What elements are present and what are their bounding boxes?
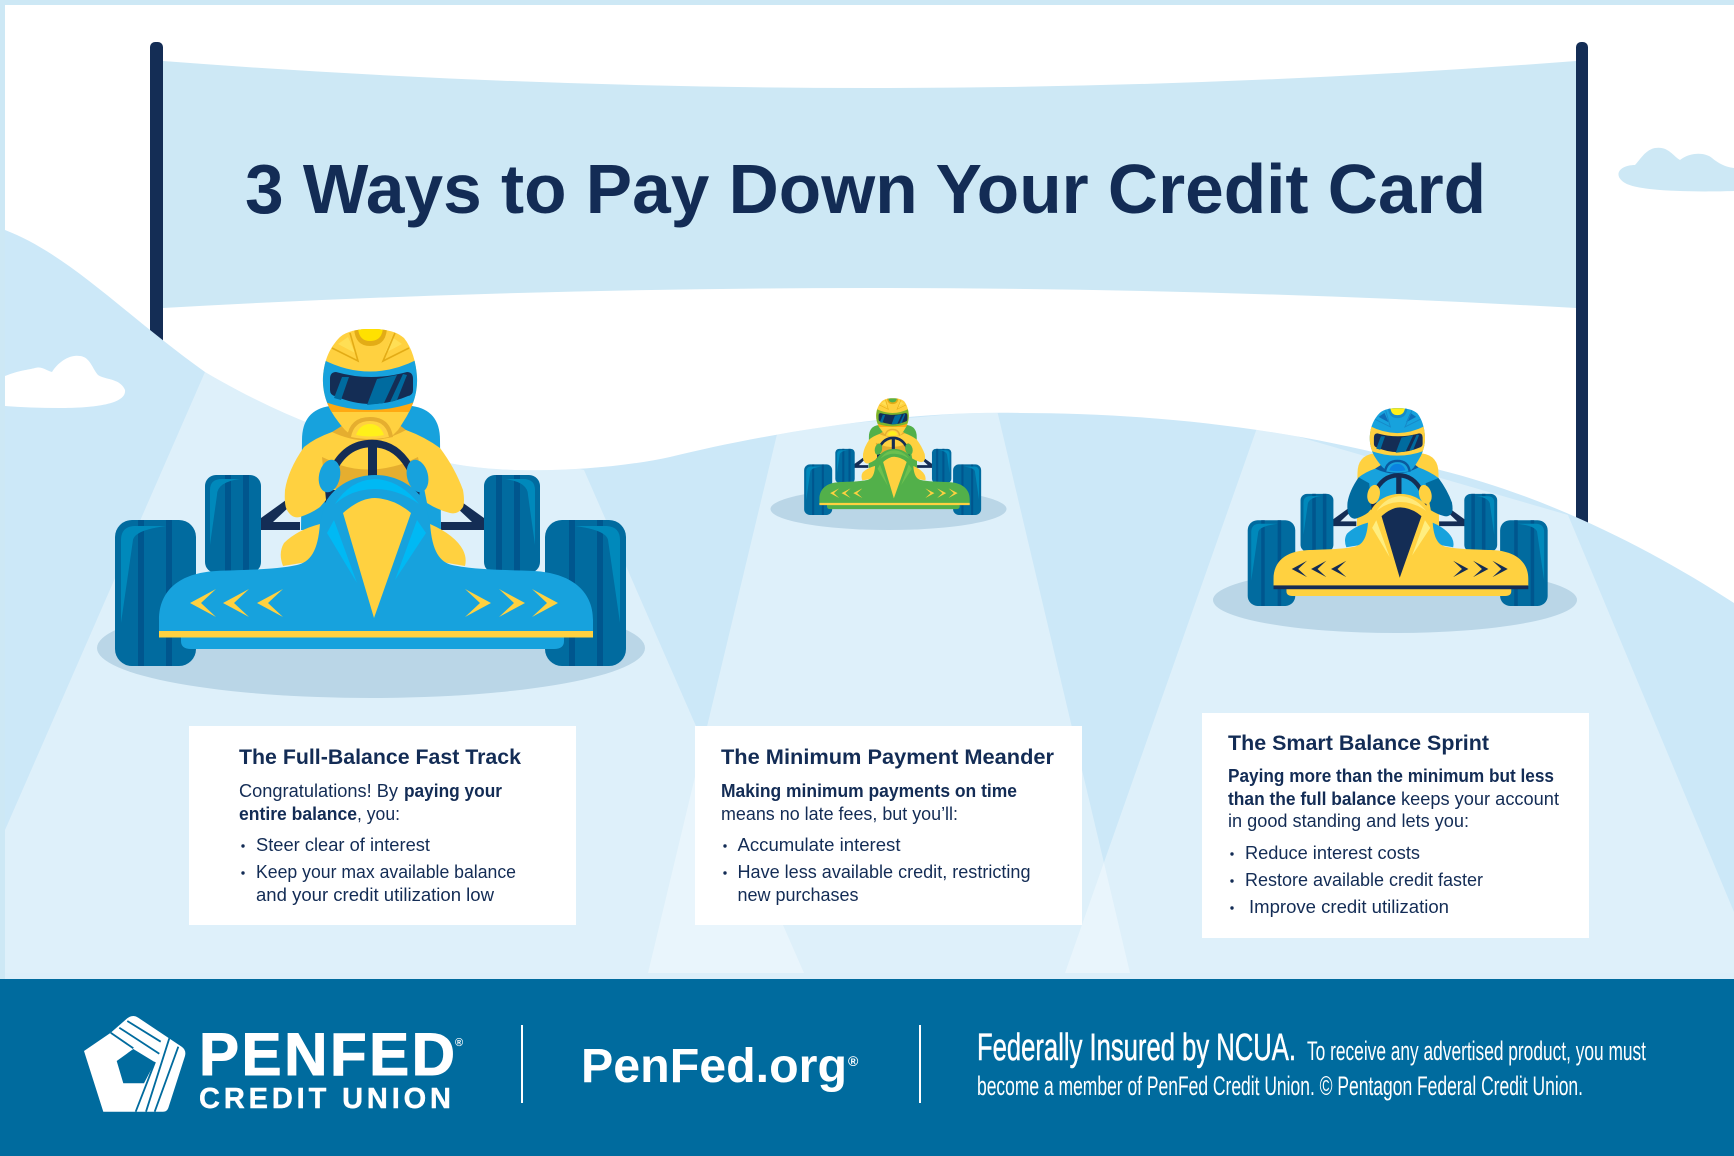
website: ®	[848, 1053, 859, 1069]
logo wordmark: PENFED	[199, 1021, 455, 1088]
kart wheels	[804, 449, 981, 515]
panel bullet list	[723, 835, 1030, 905]
panel: The Smart Balance Sprint	[1202, 713, 1589, 938]
panel heading: The Minimum Payment Meander	[721, 746, 1054, 769]
panel bullet list	[241, 835, 516, 905]
banner right pole	[1576, 42, 1588, 542]
panel intro text: Paying more than the minimum but less	[1228, 766, 1554, 786]
divider	[919, 1025, 921, 1103]
track: center	[648, 410, 1130, 973]
panel intro text: than the full balance	[1228, 789, 1396, 809]
panel intro text: entire balance	[239, 804, 357, 824]
panel bullet list: Have less available credit, restricting	[738, 862, 1030, 882]
kart shadow	[97, 598, 645, 698]
disclosure text	[977, 1027, 1646, 1101]
icon: PenFed logo mark	[84, 1016, 185, 1112]
kart body	[1274, 494, 1528, 596]
panel bullet list: Steer clear of interest	[256, 835, 430, 855]
panel intro text: Making minimum payments on time	[721, 781, 1017, 801]
kart wheels	[115, 475, 626, 666]
driver	[281, 328, 466, 566]
panel heading: The Smart Balance Sprint	[1228, 732, 1489, 755]
divider	[521, 1025, 523, 1103]
title: 3 Ways to Pay Down Your Credit Card	[245, 150, 1486, 228]
website: PenFed.org	[581, 1040, 847, 1093]
disclosure text: Federally Insured by NCUA.	[977, 1027, 1296, 1069]
panel heading: The Full-Balance Fast Track	[239, 746, 521, 769]
panel bullet list: Improve credit utilization	[1249, 897, 1449, 917]
background border	[0, 0, 1734, 5]
banner left pole	[150, 42, 163, 382]
driver	[862, 398, 926, 480]
panel: The Minimum Payment Meander	[695, 726, 1082, 925]
kart shadow	[770, 488, 1006, 530]
go-kart: blue with yellow driver	[97, 328, 645, 698]
panel intro text: keeps your account	[1401, 789, 1559, 809]
kart shadow	[1213, 567, 1577, 633]
cloud: top right	[1618, 148, 1734, 191]
kart body	[159, 475, 593, 649]
panel intro text: paying your	[404, 781, 502, 801]
logo wordmark: ®	[455, 1037, 463, 1049]
panel intro text: Congratulations! By	[239, 781, 398, 801]
driver	[1345, 408, 1454, 547]
kart wheels	[1248, 494, 1548, 606]
go-kart: green with yellow driver	[770, 398, 1006, 530]
logo wordmark	[199, 1021, 463, 1115]
panel intro text: , you:	[357, 804, 400, 824]
panel intro text	[239, 781, 502, 824]
banner	[163, 61, 1576, 308]
panel bullet list: Reduce interest costs	[1245, 843, 1420, 863]
panel bullet list: Accumulate interest	[738, 835, 900, 855]
logo wordmark: CREDIT UNION	[199, 1083, 451, 1115]
panel bullet list: new purchases	[738, 885, 858, 905]
panel intro text	[1228, 766, 1559, 831]
panel bullet list: and your credit utilization low	[256, 885, 495, 905]
cloud: left	[5, 356, 125, 408]
track: left	[5, 372, 804, 973]
go-kart: yellow with blue driver	[1213, 408, 1577, 633]
panel bullet list	[1230, 843, 1483, 917]
panel: The Full-Balance Fast Track	[189, 726, 576, 925]
panel intro text: means no late fees, but you’ll:	[721, 804, 958, 824]
footer band	[0, 979, 1734, 1156]
hills and race tracks	[5, 200, 1734, 979]
track: right	[1065, 425, 1734, 973]
panel intro text	[721, 781, 1017, 824]
kart body	[819, 449, 970, 509]
panel intro text: in good standing and lets you:	[1228, 811, 1469, 831]
panel bullet list: Restore available credit faster	[1245, 870, 1483, 890]
panel bullet list: Keep your max available balance	[256, 862, 516, 882]
